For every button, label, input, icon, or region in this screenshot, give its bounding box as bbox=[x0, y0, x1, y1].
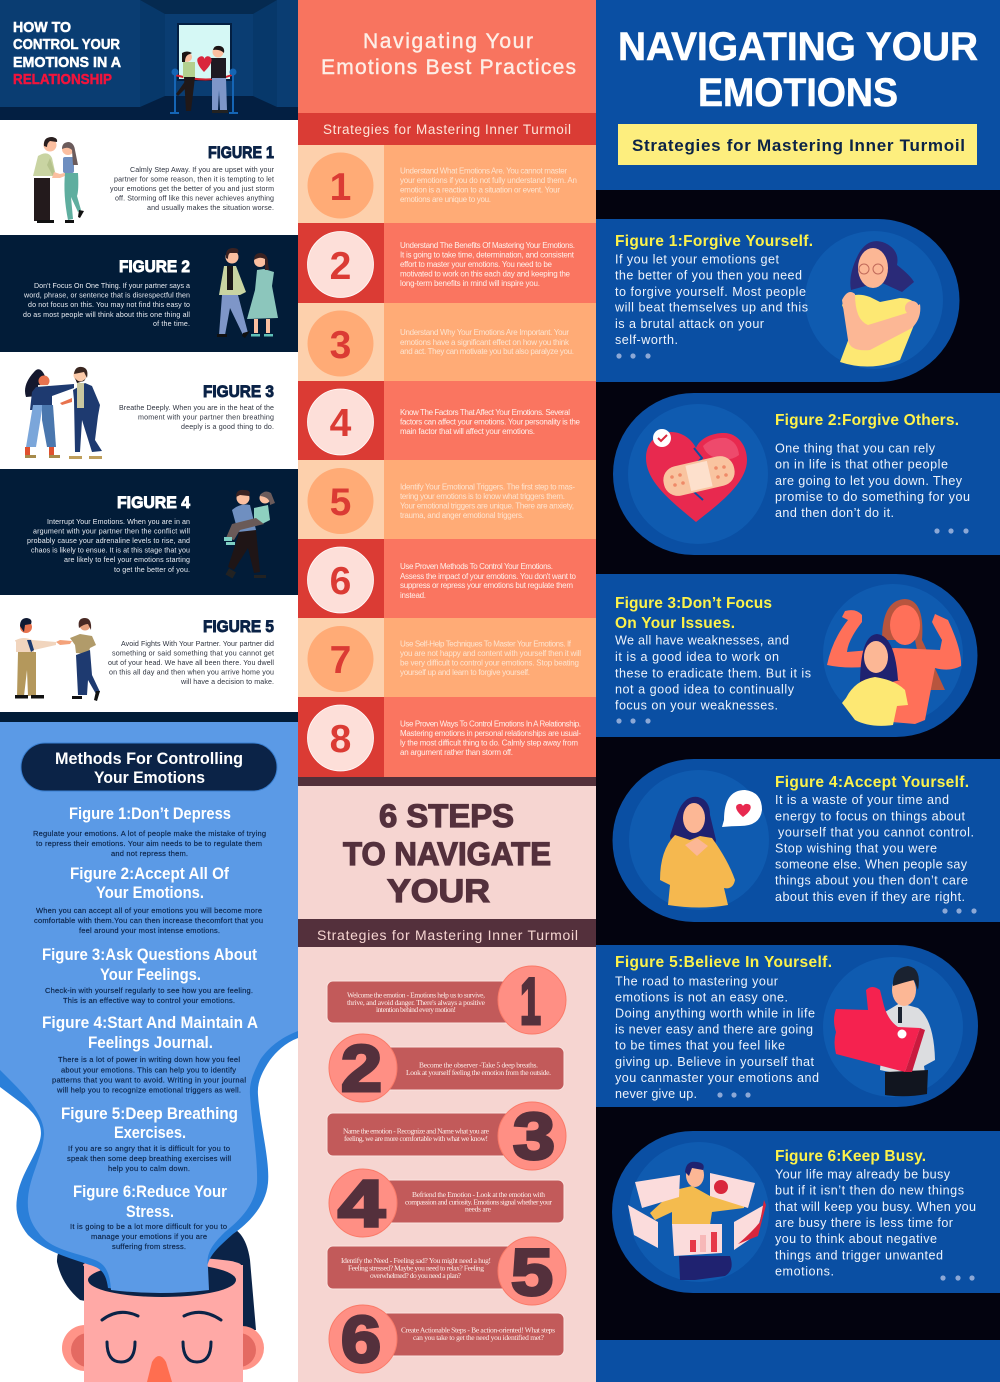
method 6: suffering from stress. bbox=[112, 1242, 186, 1251]
text: figure 4 bbox=[27, 493, 191, 574]
text: figure 2 bbox=[23, 257, 190, 328]
text: figure 1: and usually makes the situation worse. bbox=[147, 204, 274, 212]
card: figure 1 forgive yourself bbox=[596, 219, 959, 382]
text: don't focus: focus on your weaknesses. bbox=[615, 698, 778, 712]
step 2: 2 bbox=[341, 1031, 382, 1105]
panel: figure 5 bbox=[0, 595, 298, 712]
text: believe in yourself: The road to mastering your bbox=[615, 974, 778, 988]
step 4: compassion and curiosity. Emotions signal whether your bbox=[405, 1198, 552, 1206]
practice 2: long-term benefits in mind will inspire you. bbox=[400, 279, 540, 288]
method 5: If you are so angry that it is difficult for you to bbox=[68, 1144, 230, 1153]
practice 2: effort to master your emotions. You need to be bbox=[400, 260, 553, 269]
step 4: needs are bbox=[465, 1204, 492, 1214]
text: figure 2: word, phrase, or sentence that is disrespectful then bbox=[23, 292, 190, 300]
title: navigating your emotions bbox=[618, 25, 978, 115]
method 4: Feelings Journal. bbox=[88, 1034, 213, 1052]
text: keep busy: things and trigger unwanted bbox=[775, 1248, 943, 1262]
text: figure 2: do not focus on this. You may not find this easy to bbox=[28, 301, 190, 309]
heading pill bbox=[21, 743, 277, 791]
title: how to control your emotions in a relationship: RELATIONSHIP bbox=[13, 71, 112, 88]
practice 1: emotions are unique to you. bbox=[400, 195, 491, 204]
practice 2: It is going to take time, determination, and consistent bbox=[400, 250, 575, 260]
text: forgive yourself: the better of you then you need bbox=[615, 268, 802, 282]
step 4: 4 bbox=[338, 1166, 385, 1240]
text: keep busy: Figure 6:Keep Busy. bbox=[775, 1148, 926, 1165]
text: figure 4: to get the better of you. bbox=[114, 566, 190, 574]
title: 6 steps to navigate your: 6 STEPS bbox=[379, 798, 514, 834]
practice 4: 4 bbox=[330, 402, 352, 445]
practice 6: suppress or repress your emotions but regulate them bbox=[400, 581, 573, 590]
step 1: Welcome the emotion - Emotions help us to survive, bbox=[347, 990, 485, 1000]
text: don't focus: Figure 3:Don’t Focus bbox=[615, 595, 772, 612]
text: figure 1 bbox=[110, 143, 275, 212]
step 1: thrive, and avoid danger. There's always a positive bbox=[347, 998, 486, 1007]
method 1: and not repress them. bbox=[111, 849, 188, 858]
practice 8: 8 bbox=[330, 718, 351, 761]
step 3: feeling, we are more comfortable with what we know! bbox=[344, 1134, 488, 1143]
carousel dots bbox=[616, 718, 651, 724]
text: forgive others: Figure 2:Forgive Others. bbox=[775, 412, 959, 429]
method 2: feel around your most intense emotions. bbox=[79, 926, 220, 935]
title: how to control your emotions in a relationship: EMOTIONS IN A bbox=[13, 54, 121, 71]
text: figure 1: FIGURE 1 bbox=[208, 143, 274, 162]
practice 8: an argument rather than storm off. bbox=[400, 748, 513, 757]
method 2: comfortable with them.You can then increase thecomfort that you bbox=[34, 916, 263, 925]
card: figure 6 keep busy bbox=[612, 1131, 1000, 1293]
carousel dots bbox=[934, 528, 969, 534]
method 4: There is a lot of power in writing down how you feel bbox=[58, 1055, 240, 1064]
title: how to control your emotions in a relationship: CONTROL YOUR bbox=[13, 36, 120, 53]
text: believe in yourself: Doing anything worth while in life bbox=[615, 1007, 815, 1021]
text: accept yourself: things about you then don’t care bbox=[775, 874, 968, 888]
practice 5 bbox=[298, 460, 596, 539]
text: believe in yourself: giving up. Believe in yourself that bbox=[615, 1055, 814, 1069]
text: figure 2: FIGURE 2 bbox=[119, 257, 190, 276]
method 5: Figure 5:Deep Breathing bbox=[61, 1105, 238, 1123]
icon: man carrying woman bbox=[224, 490, 275, 578]
text: forgive others: and then don’t do it. bbox=[775, 506, 894, 520]
text: accept yourself: yourself that you cannot control. bbox=[778, 826, 974, 840]
subtitle band bbox=[298, 919, 596, 947]
panel: best practices header bbox=[298, 0, 596, 145]
text: figure 4: Interrupt Your Emotions. When you are in an bbox=[47, 518, 190, 526]
method 3: Figure 3:Ask Questions About bbox=[42, 946, 257, 964]
heading pill: Your Emotions bbox=[94, 768, 205, 787]
step 6 bbox=[329, 1302, 564, 1376]
practice 5: Your emotional triggers are unique. There are anxiety, bbox=[400, 502, 574, 510]
subtitle banner bbox=[618, 124, 977, 165]
practice 3 bbox=[298, 303, 596, 381]
step 5: 5 bbox=[511, 1235, 553, 1309]
icon: woman hugging herself bbox=[840, 241, 920, 367]
text: figure 4: FIGURE 4 bbox=[117, 493, 191, 512]
practice 6: instead. bbox=[400, 591, 426, 600]
carousel dots bbox=[942, 908, 977, 914]
text: figure 4: chaos is likely to ensue. It is at this stage that you bbox=[31, 546, 190, 554]
practice 2 bbox=[298, 223, 596, 303]
method 5: Exercises. bbox=[114, 1124, 186, 1142]
heading pill: Methods For Controlling bbox=[55, 749, 243, 768]
text: accept yourself: about this even if they are right. bbox=[775, 890, 965, 904]
method 3: Check-in with yourself regularly to see how you are feeling. bbox=[45, 986, 253, 995]
text: figure 5: something or said something that you cannot get bbox=[112, 650, 274, 658]
text: don't focus: We all have weaknesses, and bbox=[615, 634, 789, 648]
method 1: Figure 1:Don’t Depress bbox=[69, 805, 231, 823]
text: figure 3: moment with your partner then breathing bbox=[138, 414, 274, 422]
carousel dots bbox=[717, 1092, 751, 1098]
title: how to control your emotions in a relationship bbox=[13, 19, 121, 88]
step 6: Create Actionable Steps - Be action-oriented! What steps bbox=[401, 1326, 555, 1334]
icon: broken heart with bandage bbox=[646, 429, 747, 522]
title: how to control your emotions in a relationship: HOW TO bbox=[13, 19, 71, 36]
text: figure 4: probably cause your adrenaline levels to rise, and bbox=[27, 537, 190, 545]
icon: woman and strong shadow bbox=[827, 599, 961, 726]
title: navigating your emotions best practices bbox=[321, 30, 576, 79]
practice 1: Understand What Emotions Are. You cannot master bbox=[400, 166, 567, 176]
step 2: Become the observer -Take 5 deep breaths. bbox=[419, 1060, 538, 1070]
step 2: Look at yourself feeling the emotion from the outside. bbox=[406, 1068, 551, 1077]
text: believe in yourself: you canmaster your emotions and bbox=[615, 1071, 819, 1085]
icon: two colleagues shaking hands bbox=[25, 367, 102, 459]
practice 8: ly the most difficult thing to do. Calmly step away from bbox=[400, 738, 578, 748]
text: forgive yourself: Figure 1:Forgive Yourself. bbox=[615, 233, 813, 250]
method 5: speak then some deep breathing exercises will bbox=[67, 1154, 231, 1163]
practice 1 bbox=[298, 145, 596, 223]
text: don't focus bbox=[615, 595, 811, 712]
step 4 bbox=[329, 1166, 564, 1240]
text: believe in yourself: to be times that you feel like bbox=[615, 1039, 785, 1053]
practice 7: 7 bbox=[330, 639, 351, 682]
text: keep busy: you to think about negative bbox=[775, 1232, 937, 1246]
text: figure 5: on this all day and then when you arrive home you bbox=[109, 668, 274, 676]
method 1: to repress their emotions. Your aim needs to be to regulate them bbox=[36, 839, 262, 848]
text: forgive yourself: is a brutal attack on your bbox=[615, 317, 764, 331]
text: figure 4: argument with your partner then the conflict will bbox=[33, 528, 190, 536]
icon: couple walking bbox=[217, 248, 278, 338]
text: believe in yourself: Figure 5:Believe In Yourself. bbox=[615, 954, 832, 971]
text: keep busy: are busy there is less time for bbox=[775, 1216, 953, 1230]
subtitle band text: Strategies for Mastering Inner Turmoil bbox=[323, 122, 571, 137]
practice 4: Know The Factors That Affect Your Emotions. Several bbox=[400, 408, 570, 417]
text: accept yourself: someone else. When people say bbox=[775, 858, 968, 872]
text: figure 2: do as most people will think about this one thing all bbox=[23, 311, 190, 319]
method 6: It is going to be a lot more difficult for you to bbox=[70, 1222, 227, 1231]
method 5 bbox=[61, 1105, 238, 1173]
text: accept yourself: Figure 4:Accept Yourself. bbox=[775, 774, 969, 791]
practice 8: Use Proven Ways To Control Emotions In A Relationship. bbox=[400, 720, 581, 728]
background: blue thought stream bbox=[0, 722, 298, 1293]
step 4: Befriend the Emotion - Look at the emotion with bbox=[412, 1190, 545, 1199]
practice 3: 3 bbox=[330, 324, 351, 367]
title: 6 steps to navigate your: YOUR bbox=[387, 873, 490, 909]
text: accept yourself: Stop wishing that you were bbox=[775, 842, 937, 856]
method 2: Your Emotions. bbox=[96, 884, 204, 902]
practice 3: emotions have a significant effect on how you think bbox=[400, 338, 570, 347]
step 1: intention behind every motion! bbox=[376, 1005, 456, 1014]
practice 5: Identify Your Emotional Triggers. The first step to mas- bbox=[400, 482, 575, 492]
practice 5: tering your emotions is to know what triggers them. bbox=[400, 492, 565, 501]
title: navigating your emotions: EMOTIONS bbox=[698, 71, 898, 115]
panel: figure 1 bbox=[0, 120, 298, 235]
text: figure 5: FIGURE 5 bbox=[203, 617, 274, 636]
method 5: help you to calm down. bbox=[108, 1164, 190, 1173]
step 6: 6 bbox=[341, 1302, 381, 1376]
icon: man with floating screens bbox=[628, 1162, 766, 1280]
text: keep busy: that will keep you busy. When you bbox=[775, 1200, 976, 1214]
text: forgive others: on in life is that other people bbox=[775, 458, 948, 472]
text: keep busy: Your life may already be busy bbox=[775, 1168, 951, 1182]
text: keep busy: emotions. bbox=[775, 1264, 834, 1278]
practice 2: motivated to work on this each day and keeping the bbox=[400, 270, 571, 278]
step 3: 3 bbox=[513, 1099, 555, 1173]
carousel dots bbox=[616, 353, 651, 359]
subtitle band: Strategies for Mastering Inner Turmoil bbox=[317, 927, 578, 943]
step 5: Identify the Need - Feeling sad? You might need a hug! bbox=[341, 1256, 491, 1265]
practice 1: 1 bbox=[330, 166, 351, 209]
method 6 bbox=[70, 1183, 228, 1251]
text: don't focus: not a good idea to continually bbox=[615, 682, 795, 696]
text: figure 5: Avoid Fights With Your Partner. Your partner did bbox=[121, 640, 274, 648]
practice 7 bbox=[298, 618, 596, 697]
method 6: Figure 6:Reduce Your bbox=[73, 1183, 228, 1201]
text: forgive others: One thing that you can rely bbox=[775, 442, 936, 456]
text: figure 3 bbox=[119, 382, 274, 431]
card: figure 2 forgive others bbox=[613, 393, 1000, 555]
text: don't focus: these to eradicate them. But it is bbox=[615, 666, 811, 680]
title: navigating your emotions: NAVIGATING YOUR bbox=[618, 25, 978, 69]
step 6: can you take to get the need you identified met? bbox=[413, 1333, 545, 1342]
step 5 bbox=[327, 1235, 566, 1309]
panel: relationship header bbox=[0, 0, 298, 120]
practice 8 bbox=[298, 697, 596, 777]
text: believe in yourself: never give up. bbox=[615, 1087, 697, 1101]
icon: head with thoughts flowing out bbox=[57, 1225, 264, 1382]
text: forgive others: promise to do something for you bbox=[775, 490, 970, 504]
practice 7: you are not happy and content with yourself then it will bbox=[400, 649, 581, 658]
practice 6 bbox=[298, 539, 596, 618]
carousel dots bbox=[940, 1275, 975, 1281]
text: figure 5: out of your head. We have all been there. You dwell bbox=[108, 659, 274, 667]
practice 6: Use Proven Methods To Control Your Emotions. bbox=[400, 562, 553, 571]
practice 2: Understand The Benefits Of Mastering Your Emotions. bbox=[400, 241, 575, 250]
practice 5: trauma, and anger emotional triggers. bbox=[400, 511, 524, 520]
card: figure 5 believe in yourself bbox=[596, 945, 978, 1107]
icon: man and woman handshake bbox=[15, 618, 100, 701]
text: believe in yourself: is never easy and there are going bbox=[615, 1023, 813, 1037]
method 2: When you can accept all of your emotions you will become more bbox=[36, 906, 262, 915]
practice 1: your emotions if you do not fully understand them. An bbox=[400, 176, 577, 185]
text: forgive others bbox=[775, 412, 970, 520]
practice 3: and act. They can motivate you but also paralyze you. bbox=[400, 347, 574, 356]
text: accept yourself: It is a waste of your time and bbox=[775, 793, 949, 807]
panel: 6 steps to navigate bbox=[298, 786, 596, 1382]
panel: figure 2 bbox=[0, 235, 298, 352]
icon: couple at the gallery with a heart bbox=[170, 24, 238, 114]
practice 6: 6 bbox=[330, 560, 351, 603]
method 3: This is an effective way to control your emotions. bbox=[63, 996, 235, 1005]
title: 6 steps to navigate your bbox=[343, 798, 551, 909]
text: figure 2: Don't Focus On One Thing. If your partner says a bbox=[34, 282, 190, 290]
method 4: Figure 4:Start And Maintain A bbox=[42, 1014, 258, 1032]
text: figure 3: deeply is a good thing to do. bbox=[181, 423, 274, 431]
card: figure 3 don't focus on your issues bbox=[596, 574, 978, 737]
method 1: Regulate your emotions. A lot of people make the mistake of trying bbox=[33, 829, 266, 838]
practice 7: yourself up and learn to forgive yourself. bbox=[400, 668, 530, 677]
practice 4: main factor that will affect your emotions. bbox=[400, 427, 535, 436]
method 4 bbox=[42, 1014, 258, 1094]
text: figure 1: partner for some reason, then it is tempting to let bbox=[114, 176, 274, 184]
title: navigating your emotions best practices: Emotions Best Practices bbox=[321, 56, 576, 79]
text: believe in yourself bbox=[615, 954, 832, 1101]
text: don't focus: it is a good idea to work on bbox=[615, 650, 779, 664]
text: figure 1: off. Storming off like this never achieves anything bbox=[115, 194, 274, 202]
practice 8: Mastering emotions in personal relationships are usual- bbox=[400, 729, 581, 738]
practice 3: Understand Why Your Emotions Are Important. Your bbox=[400, 328, 569, 337]
text: keep busy bbox=[775, 1148, 976, 1278]
text: forgive yourself: to forgive yourself. Most people bbox=[615, 285, 806, 299]
title: navigating your emotions best practices: Navigating Your bbox=[363, 30, 533, 53]
title: 6 steps to navigate your: TO NAVIGATE bbox=[343, 836, 551, 872]
practice 7: be very difficult to control your emotions. Stop beating bbox=[400, 658, 579, 668]
panel: figure 4 bbox=[0, 469, 298, 595]
step 3: Name the emotion - Recognize and Name what you are bbox=[343, 1126, 490, 1136]
step 3 bbox=[327, 1099, 566, 1173]
text: figure 1: your emotions get the better of you and just storm bbox=[110, 185, 274, 193]
method 4: patterns that you want to avoid. Writing in your journal bbox=[52, 1076, 246, 1084]
practice 2: 2 bbox=[330, 245, 351, 288]
text: figure 3: FIGURE 3 bbox=[203, 382, 274, 401]
text: figure 2: of the time. bbox=[153, 320, 190, 328]
icon: couple holding hands bbox=[33, 137, 84, 223]
panel: right column background and title bbox=[596, 0, 1000, 1382]
text: figure 5: will have a decision to make. bbox=[180, 678, 274, 686]
text: figure 1: Calmly Step Away. If you are upset with your bbox=[130, 166, 275, 174]
text: believe in yourself: emotions is not an easy one. bbox=[615, 991, 788, 1005]
text: accept yourself: energy to focus on things about bbox=[775, 809, 966, 823]
method 3: Your Feelings. bbox=[100, 966, 201, 984]
panel: figure 3 bbox=[0, 352, 298, 469]
method 4: about your emotions. This can help you to identify bbox=[61, 1066, 236, 1074]
text: forgive yourself bbox=[614, 233, 813, 347]
method 2: Figure 2:Accept All Of bbox=[70, 865, 229, 883]
icon: woman with heart speech bubble bbox=[660, 790, 762, 908]
practice 4 bbox=[298, 381, 596, 460]
method 1 bbox=[33, 805, 266, 858]
text: figure 4: are likely to feel your emotions starting bbox=[64, 556, 190, 564]
method 6: manage your emotions if you are bbox=[91, 1232, 207, 1241]
text: forgive yourself: self-worth. bbox=[615, 333, 678, 347]
text: figure 5 bbox=[108, 617, 274, 686]
text: forgive yourself: If you let your emotions get bbox=[615, 252, 780, 266]
practice 5: 5 bbox=[330, 481, 351, 524]
text: don't focus: On Your Issues. bbox=[615, 615, 735, 632]
step 1 bbox=[327, 964, 566, 1038]
practice 7: Use Self-Help Techniques To Master Your Emotions. If bbox=[400, 640, 572, 648]
icon: man with thumbs up bbox=[834, 966, 935, 1096]
practice 6: Assess the impact of your emotions. You don't want to bbox=[400, 572, 577, 581]
text: forgive yourself: will beat themselves up and this bbox=[614, 300, 808, 314]
method 6: Stress. bbox=[126, 1203, 174, 1221]
step 5: overwhelmed? do you need a plan? bbox=[370, 1271, 462, 1280]
method 3 bbox=[42, 946, 257, 1005]
panel: methods for controlling your emotions bbox=[0, 722, 298, 1382]
step 1: 1 bbox=[520, 964, 541, 1038]
text: figure 3: Breathe Deeply. When you are in the heat of the bbox=[119, 404, 274, 412]
step 2 bbox=[329, 1031, 564, 1105]
practice 1: emotion is a reaction to a situation or event. Your bbox=[400, 186, 560, 194]
subtitle banner: Strategies for Mastering Inner Turmoil bbox=[632, 136, 965, 155]
practice 4: factors can affect your emotions. Your personality is the bbox=[400, 418, 581, 426]
method 2 bbox=[34, 865, 263, 935]
text: forgive others: are going to let you down. They bbox=[775, 474, 963, 488]
method 4: will help you to recognize emotional triggers as well. bbox=[56, 1086, 241, 1094]
text: keep busy: but if it isn’t then do new things bbox=[775, 1184, 964, 1198]
text: accept yourself bbox=[775, 774, 974, 904]
step 5: Feeling stressed? Maybe you need to relax? Feeling bbox=[348, 1264, 484, 1272]
card: figure 4 accept yourself bbox=[612, 759, 1000, 922]
